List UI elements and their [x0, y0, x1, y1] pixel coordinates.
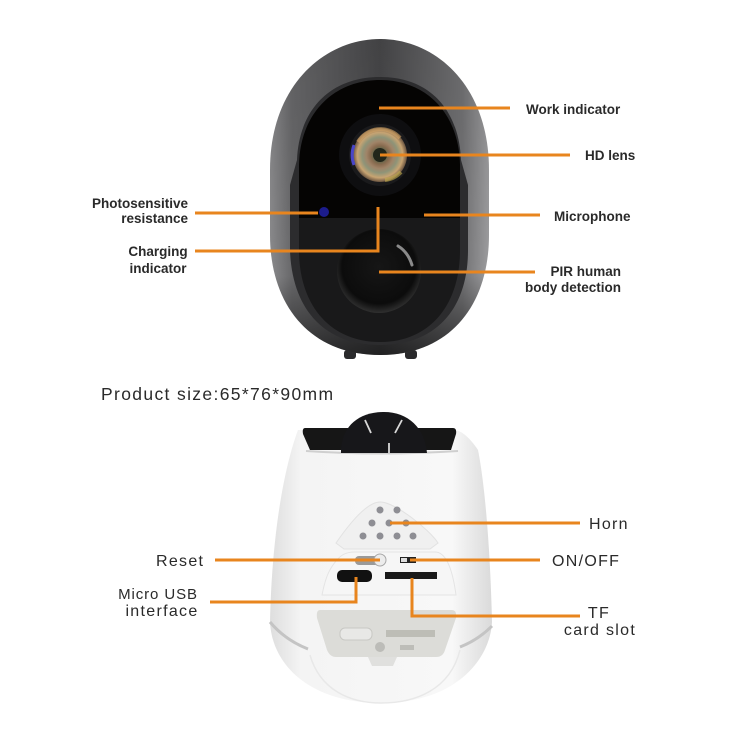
TF card slot [385, 572, 437, 579]
camera shell [270, 39, 489, 355]
on/off switch [400, 557, 416, 563]
PIR sensor dome [337, 229, 421, 313]
label: on/off: ON/OFF [552, 553, 620, 570]
label: TF card slot: TF [588, 605, 610, 622]
speaker grille plate [336, 502, 438, 549]
PIR dome back [341, 412, 427, 453]
shadow line under window [306, 451, 458, 454]
top black window [303, 428, 456, 450]
grey seam [270, 622, 492, 649]
label: photosensitive resistance: resistance [121, 211, 188, 226]
face inner rim [290, 77, 468, 345]
photosensitive sensor [319, 207, 329, 217]
label: HD lens: HD lens [585, 148, 635, 163]
camera back view [270, 412, 492, 703]
lower plate outline [310, 650, 460, 703]
reset button [355, 554, 386, 566]
label: reset: Reset [156, 553, 204, 570]
lens housing [339, 114, 421, 196]
face black upper panel [299, 80, 460, 218]
label: work indicator: Work indicator [526, 102, 621, 117]
white body [270, 430, 492, 703]
lens glass [352, 128, 407, 182]
leader lines top [195, 108, 570, 272]
micro USB port [337, 570, 372, 582]
product size: Product size:65*76*90mm [101, 384, 334, 404]
camera front view [270, 39, 489, 359]
label: microphone: Microphone [554, 209, 631, 224]
label: micro USB interface: interface [125, 603, 199, 620]
label: charging indicator: Charging [128, 244, 188, 259]
label: charging indicator: indicator [129, 261, 187, 276]
rubber flap [317, 610, 456, 666]
label: PIR human body detection: body detection [525, 280, 621, 295]
label: micro USB interface: Micro USB [118, 586, 198, 603]
label: photosensitive resistance: Photosensitive [92, 196, 188, 211]
label: horn: Horn [589, 516, 629, 533]
label: PIR human body detection: PIR human [550, 264, 621, 279]
label: TF card slot: card slot [564, 622, 636, 639]
leader lines bottom [210, 523, 580, 616]
face lower panel [299, 218, 460, 342]
ports panel [322, 552, 456, 595]
feet [344, 350, 417, 359]
